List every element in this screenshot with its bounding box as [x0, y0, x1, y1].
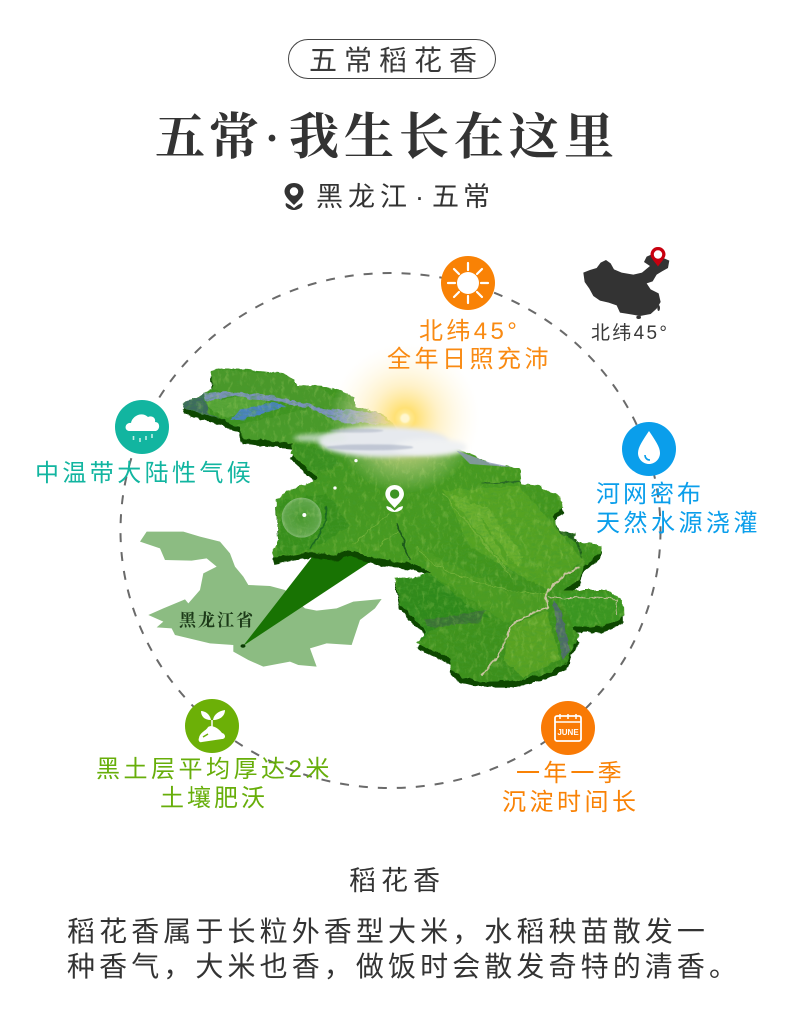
China silhouette — [583, 254, 669, 319]
description text: 种香气，大米也香，做饭时会散发奇特的清香。 — [67, 951, 741, 982]
3D terrain map of Wuchang — [170, 343, 637, 693]
icon: water drop — [622, 422, 676, 476]
dashed orbit circle — [120, 273, 660, 788]
Heilongjiang province map — [140, 532, 382, 667]
feature: soil: 土壤肥沃 — [160, 785, 268, 812]
feature: growing season: 沉淀时间长 — [502, 789, 640, 816]
lens flare circle — [282, 498, 322, 538]
badge: 五常稻花香 — [288, 40, 496, 78]
badge: 五常稻花香: 五常稻花香 — [309, 45, 484, 76]
label: sunshine: 北纬45° — [419, 318, 520, 345]
field texture — [183, 368, 616, 682]
label: growing season: 一年一季 — [516, 760, 625, 787]
icon: sun — [441, 256, 495, 310]
icon: white map pin — [385, 485, 404, 512]
map landmass — [170, 360, 637, 693]
label: climate: 中温带大陆性气候 — [35, 460, 254, 487]
title: 我生长在这里 — [289, 109, 619, 165]
field lines — [353, 493, 547, 593]
location line: 黑龙江·五常: 黑龙江 — [316, 182, 412, 212]
small China map with marker — [583, 247, 669, 344]
location line: 黑龙江·五常 — [284, 182, 494, 212]
label: water: 河网密布 — [596, 481, 704, 508]
section heading: 稻花香: 稻花香 — [349, 866, 445, 896]
map extruded edge — [182, 374, 624, 688]
description text: 稻花香属于长粒外香型大米，水稻秧苗散发一 — [67, 916, 709, 947]
clouds — [293, 426, 513, 467]
icon: sprout on soil — [185, 699, 239, 753]
feature: water: 天然水源浇灌 — [596, 510, 761, 537]
icon: rain cloud — [115, 400, 169, 454]
feature: water — [596, 422, 761, 537]
description text — [67, 916, 741, 982]
icon: location pin — [284, 183, 304, 210]
feature: climate — [35, 400, 254, 487]
province silhouette — [140, 532, 382, 667]
sun glow — [330, 343, 480, 493]
feature: soil — [96, 699, 333, 812]
feature: growing season — [502, 701, 640, 816]
icon: calendar: JUNE — [557, 728, 579, 737]
caption: latitude: 北纬45° — [591, 322, 669, 344]
label: soil: 黑土层平均厚达2米 — [96, 756, 333, 783]
title: 五常 — [155, 109, 263, 165]
feature: sunshine: 全年日照充沛 — [387, 346, 552, 373]
river and lake — [203, 392, 390, 423]
feature: sunshine — [387, 256, 552, 373]
roads — [482, 567, 617, 675]
title: · — [265, 116, 279, 162]
zoom cone from province to Wuchang — [240, 552, 376, 648]
province label: 黑龙江省 — [179, 610, 255, 630]
map surface fields — [182, 368, 624, 683]
icon: red map pin — [650, 247, 666, 266]
location line: 黑龙江·五常: · — [415, 182, 424, 212]
location line: 黑龙江·五常: 五常 — [432, 182, 494, 212]
